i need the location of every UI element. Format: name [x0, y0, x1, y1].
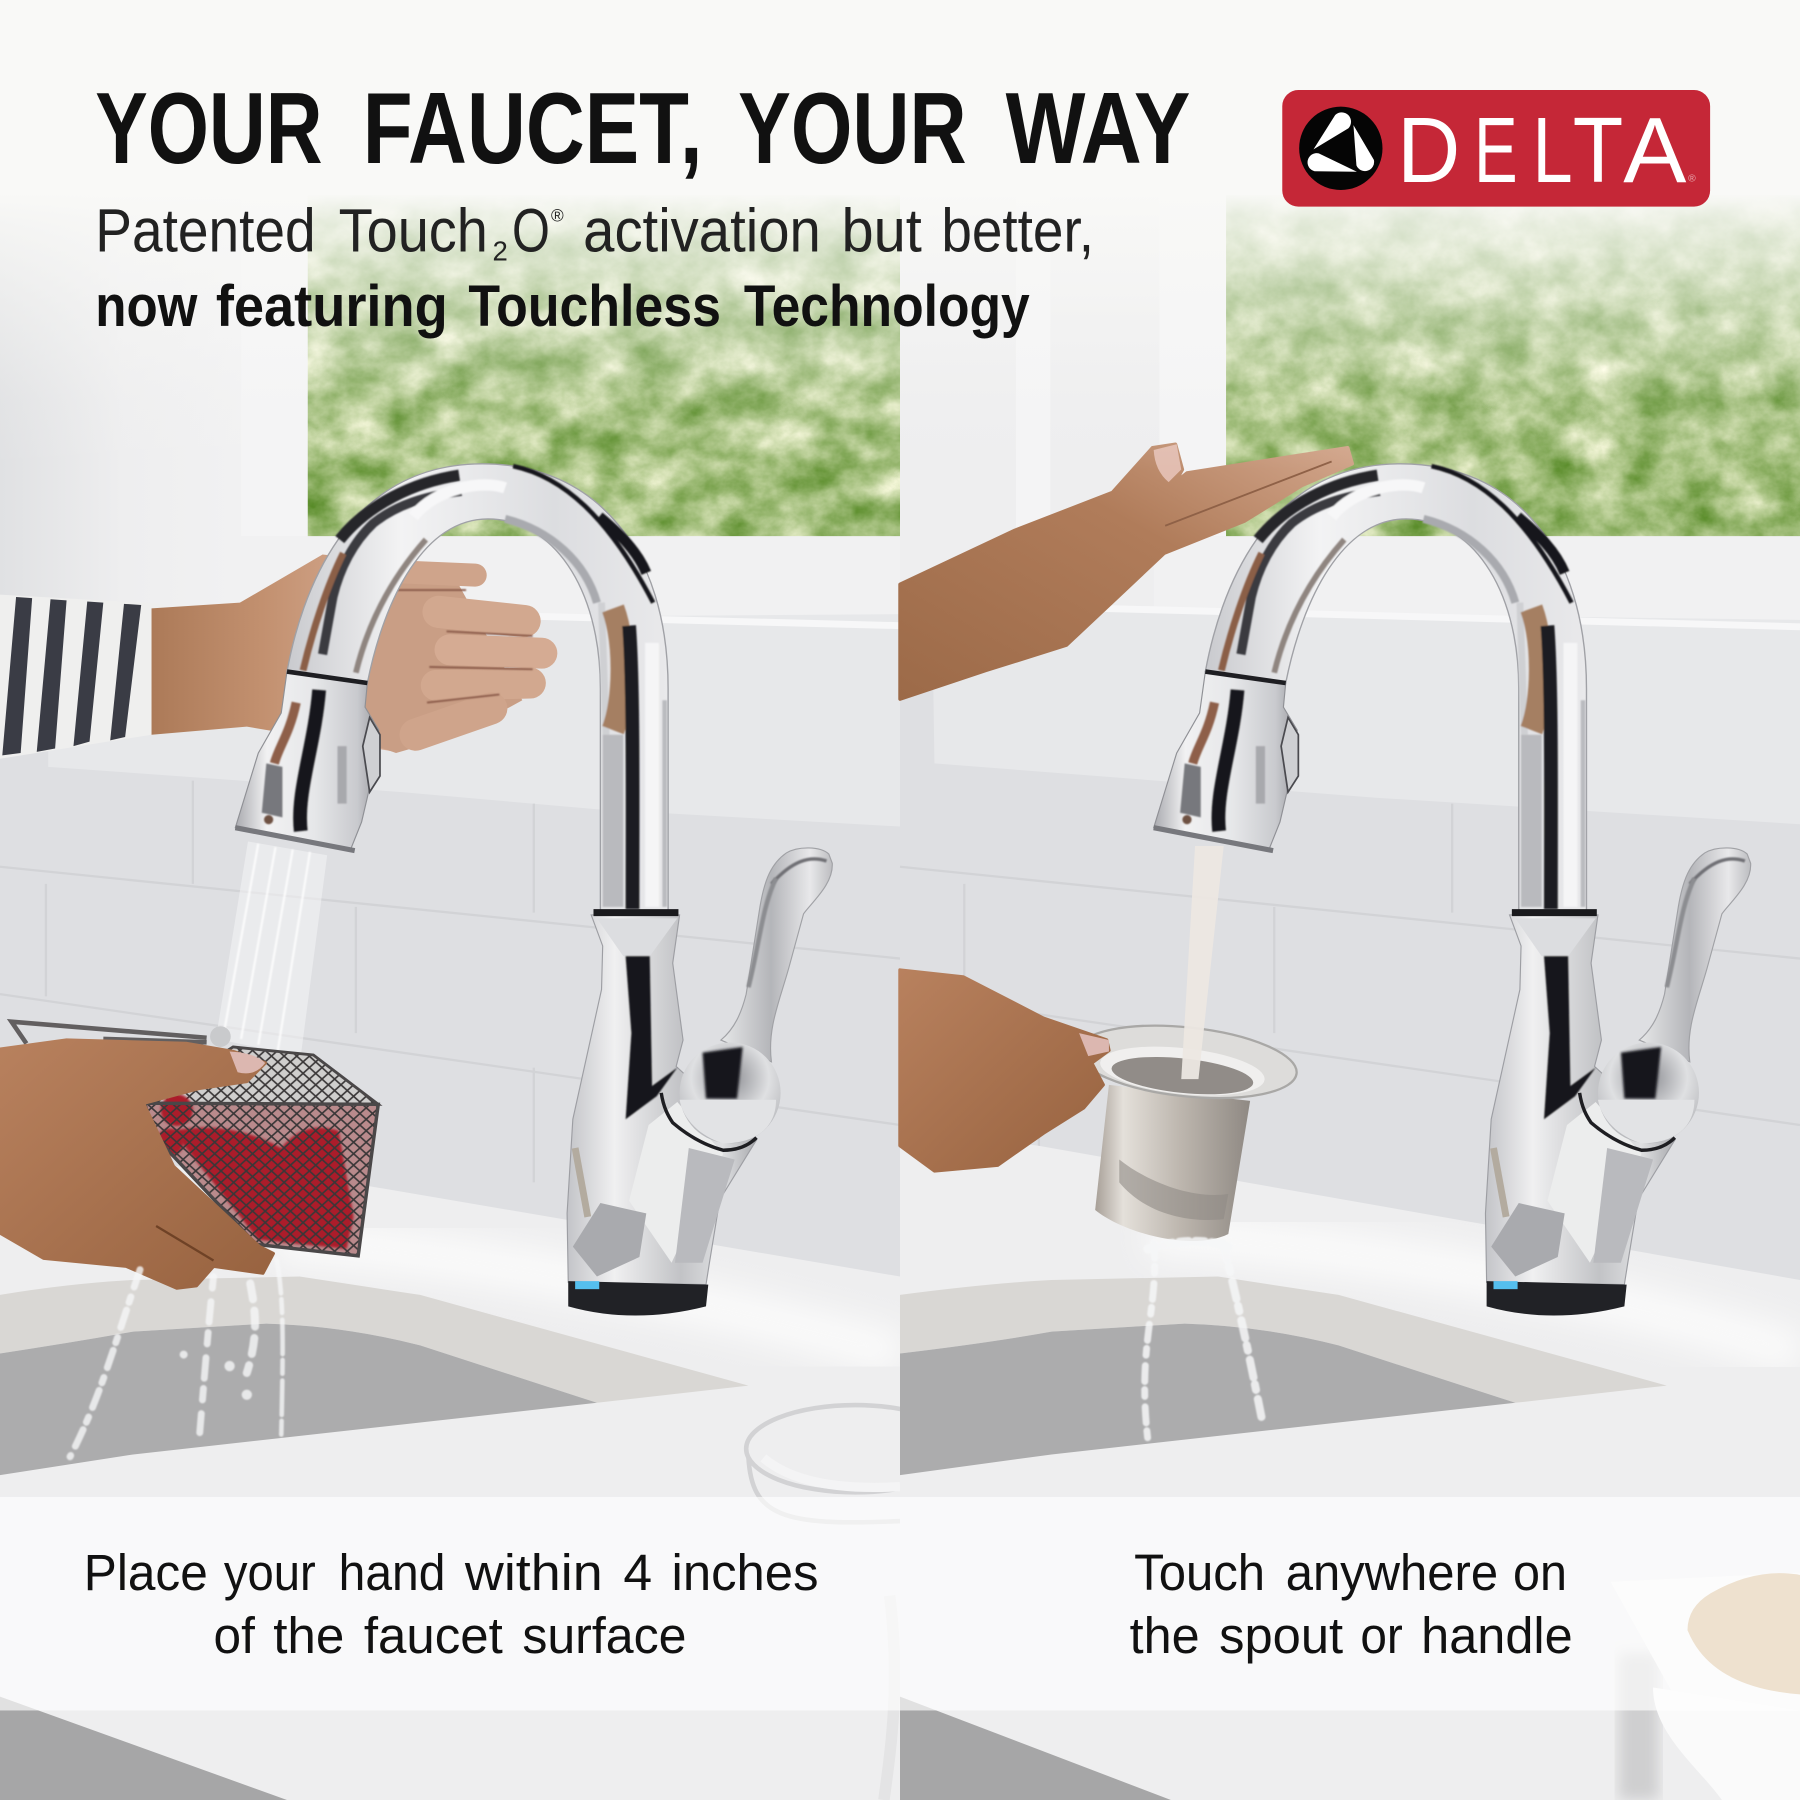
sink rim: [900, 1277, 1667, 1403]
subtitle line 1: activation: [583, 196, 821, 264]
subtitle line 1: O: [512, 196, 550, 264]
countertop: [900, 1131, 1800, 1800]
tile wall: [900, 804, 1800, 1148]
caption: right: spout: [1219, 1607, 1343, 1664]
faucet: [1154, 464, 1751, 1316]
window sill: [241, 536, 900, 626]
caption: right: anywhere: [1286, 1544, 1498, 1601]
logo: Delta: [1282, 90, 1710, 207]
faucet: [235, 464, 832, 1316]
soap dish: [1611, 1573, 1800, 1800]
water drops below hand: [70, 1259, 283, 1457]
logo wordmark: E: [1474, 98, 1518, 202]
water spray: [216, 841, 327, 1056]
water drops below strainer: [1145, 1241, 1263, 1441]
caption: left: surface: [522, 1607, 686, 1664]
caption: left: hand: [339, 1544, 445, 1601]
panel: left photo, basket under faucet spray: [0, 0, 964, 1800]
subtitle line 1: Touch: [339, 196, 488, 264]
caption: left: of: [214, 1607, 256, 1664]
caption: left: inches: [672, 1544, 818, 1601]
sleeve: [0, 595, 163, 759]
strainer cup: [1074, 1016, 1300, 1241]
wall beside window: [900, 195, 1226, 608]
subtitle line 2: Touchless: [468, 274, 721, 339]
subtitle line 2: featuring: [216, 274, 448, 339]
sink lower corner: [0, 1697, 287, 1800]
ledge: [48, 614, 900, 827]
caption: left: Place: [84, 1544, 208, 1601]
caption: right: Touch: [1134, 1544, 1265, 1601]
caption: right: the: [1130, 1607, 1200, 1664]
subtitle line 1: better,: [941, 196, 1094, 264]
logo wordmark: L: [1533, 98, 1573, 202]
subtitle line 1: Patented: [95, 196, 316, 264]
logo wordmark: A: [1623, 98, 1686, 202]
registered mark: ®: [1688, 173, 1696, 184]
caption: left: [84, 1544, 818, 1664]
window frame: [241, 195, 308, 536]
title: YOUR: [738, 73, 967, 185]
sink basin: [0, 1324, 597, 1475]
caption: right: [1130, 1544, 1573, 1664]
hand behind spout: [152, 554, 542, 753]
caption band: [0, 1497, 1800, 1710]
subtitle line 2: Technology: [744, 274, 1030, 339]
wall beside window: [0, 195, 308, 631]
caption: left: faucet: [364, 1607, 503, 1664]
caption: right: on: [1513, 1544, 1567, 1601]
tile wall: [0, 781, 900, 1182]
title: FAUCET,: [363, 73, 703, 185]
window view: foliage: [1226, 195, 1800, 537]
caption: left: 4: [623, 1544, 652, 1601]
countertop: [0, 1148, 900, 1800]
hand touching spout: [900, 444, 1352, 699]
ledge: [932, 608, 1800, 824]
subtitle line 1: 2: [492, 236, 508, 267]
top fade: [0, 0, 1800, 471]
hand holding strainer: [900, 970, 1109, 1171]
subtitle line 1: ®: [551, 206, 564, 226]
caption: right: handle: [1421, 1607, 1573, 1664]
logo wordmark: T: [1573, 98, 1623, 202]
caption: left: within: [464, 1544, 603, 1601]
caption: right: or: [1360, 1607, 1403, 1664]
sink basin: [900, 1324, 1515, 1475]
basket with berries: [11, 1022, 378, 1256]
logo wordmark: D: [1397, 98, 1460, 202]
sink rim: [0, 1277, 748, 1403]
window sill: [1154, 536, 1800, 626]
title: WAY: [1006, 73, 1190, 185]
subtitle: [95, 167, 1094, 339]
window view: foliage: [308, 195, 900, 537]
subtitle line 2: now: [95, 274, 198, 339]
panel: right photo, strainer under faucet stream: [900, 0, 1800, 1800]
subtitle line 1: but: [841, 196, 922, 264]
caption: left: your: [224, 1544, 316, 1601]
water stream: [1181, 846, 1224, 1079]
glass bowl: [746, 1405, 964, 1800]
hand holding basket: [0, 1040, 273, 1288]
caption: left: the: [273, 1607, 344, 1664]
title: YOUR: [95, 73, 323, 185]
logo mark: [1299, 107, 1382, 190]
sink lower corner: [900, 1697, 1171, 1800]
